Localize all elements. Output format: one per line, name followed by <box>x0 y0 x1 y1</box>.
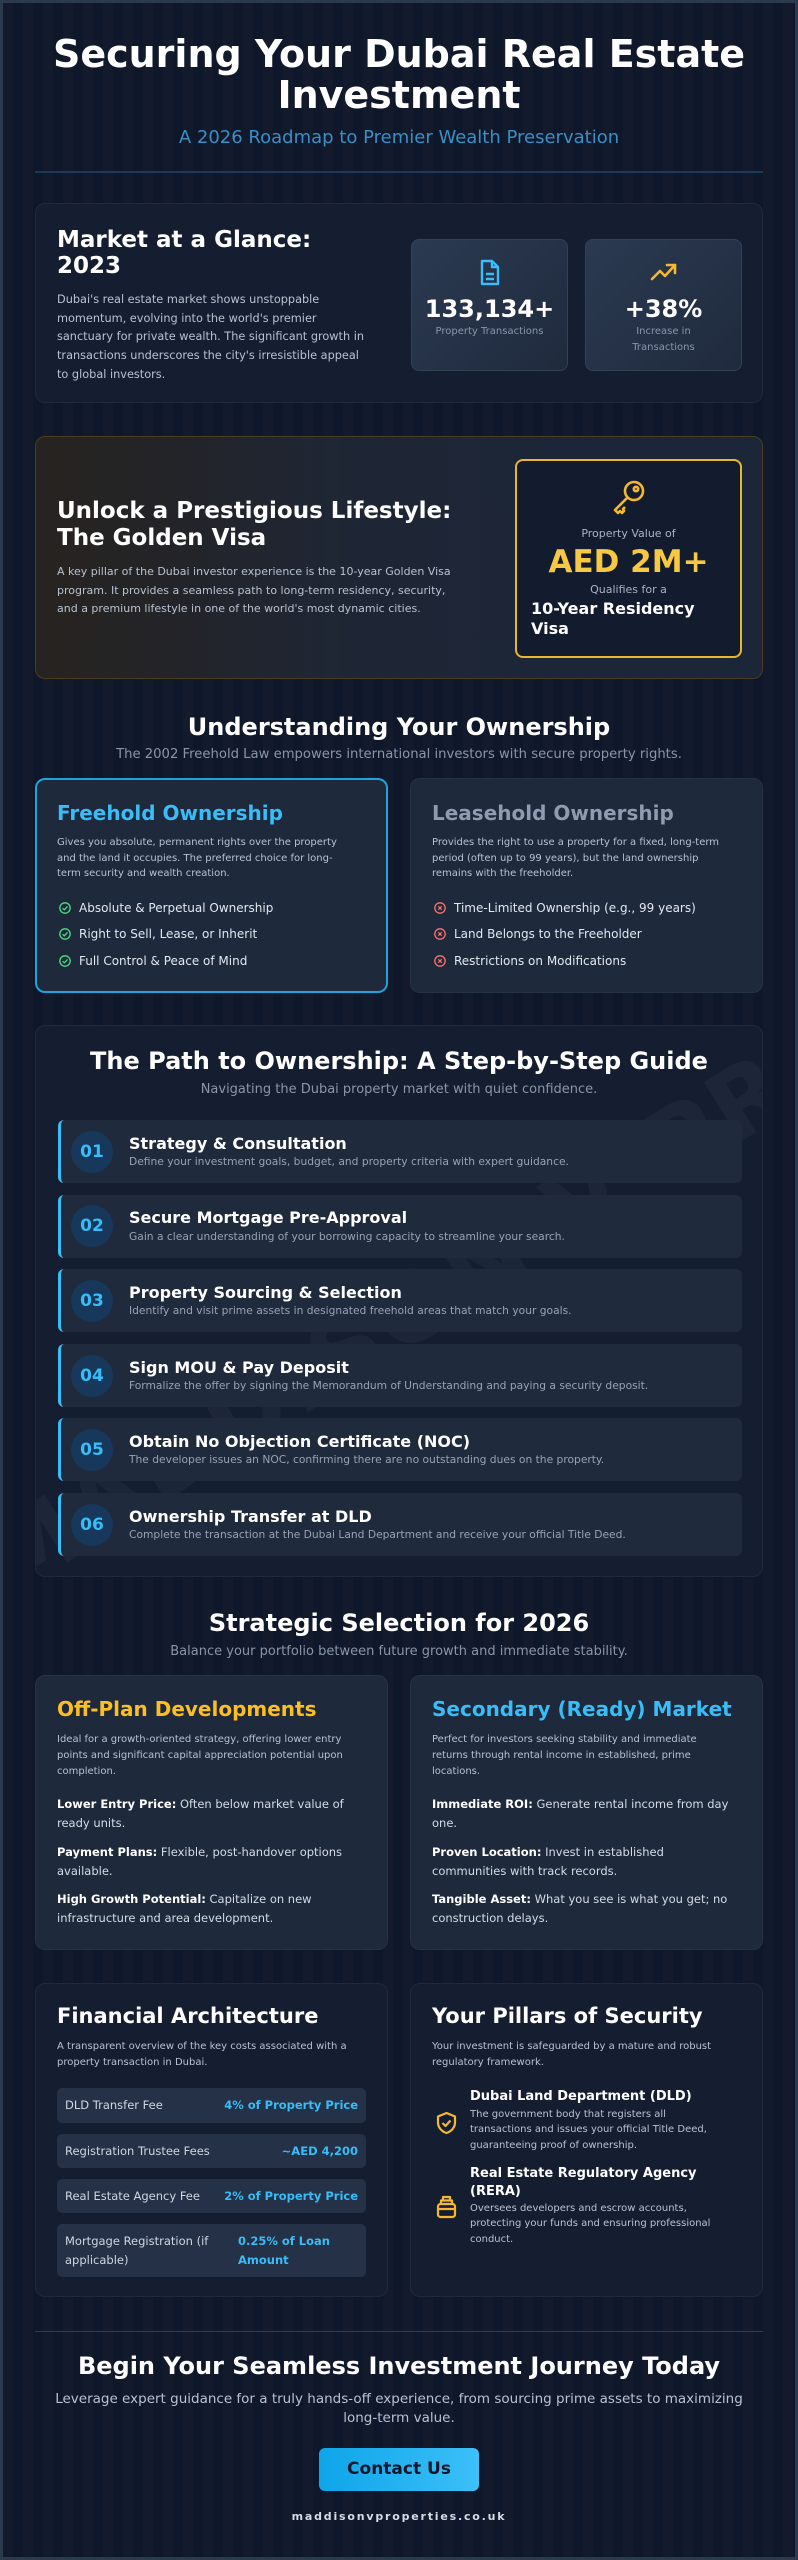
stat: increase <box>585 239 742 371</box>
button: contact us <box>319 2448 479 2491</box>
step 05: 05 <box>80 1440 104 1460</box>
panel: golden visa <box>35 436 763 679</box>
step 05 <box>58 1418 742 1481</box>
panel: secondary market: Tangible Asset: What you see is what you get; no construction delays. <box>432 1892 727 1925</box>
step 01: Define your investment goals, budget, and property criteria with expert guidance. <box>129 1155 569 1168</box>
step 04: Sign MOU & Pay Deposit <box>129 1358 349 1376</box>
step 03 <box>58 1269 742 1332</box>
CTA text: Leverage expert guidance for a truly hands-off experience, from sourcing prime assets to maximizing long-term value. <box>55 2391 743 2426</box>
panel: financial architecture: Financial Architecture <box>57 2004 318 2028</box>
fee row: trustee <box>57 2134 366 2168</box>
icon: key <box>614 480 644 514</box>
title <box>53 32 745 117</box>
panel: freehold: and the land it occupies. The preferred choice for long- <box>57 852 333 864</box>
step 03: 03 <box>80 1290 104 1310</box>
step 05: The developer issues an NOC, confirming there are no outstanding dues on the property. <box>129 1453 604 1466</box>
steps heading: The Path to Ownership: A Step-by-Step Guide <box>90 1047 708 1075</box>
list: leasehold limits <box>434 901 696 915</box>
golden visa text: A key pillar of the Dubai investor experience is the 10-year Golden Visa <box>57 565 451 578</box>
subheading: The 2002 Freehold Law empowers international investors with secure property rights. <box>116 747 682 762</box>
panel: off-plan: Off-Plan Developments <box>57 1697 317 1721</box>
fee row: DLD: DLD Transfer Fee <box>65 2098 163 2112</box>
pillar: DLD: The government body that registers all transactions and issues your official Title Deed, guaranteeing proof of ownership. <box>470 2108 707 2151</box>
step 02: 02 <box>80 1216 104 1236</box>
fee row: trustee: Registration Trustee Fees <box>65 2144 210 2158</box>
panel: freehold: Freehold Ownership <box>57 801 283 825</box>
panel: off-plan <box>35 1675 388 1950</box>
panel: leasehold: Time-Limited Ownership (e.g., 99 years) <box>454 901 696 915</box>
pillar: RERA: Real Estate Regulatory Agency (RERA) <box>470 2166 697 2198</box>
panel: pillars of security: Your Pillars of Security <box>432 2004 703 2028</box>
panel: secondary market <box>410 1675 763 1950</box>
panel: leasehold: period (often up to 99 years), but the land ownership <box>432 852 698 864</box>
pillar: DLD <box>470 2088 707 2151</box>
stat: increase: Increase in <box>636 326 691 337</box>
step 04: 04 <box>80 1366 104 1386</box>
step 03: Identify and visit prime assets in designated freehold areas that match your goals. <box>129 1304 572 1317</box>
panel: freehold: Right to Sell, Lease, or Inherit <box>79 927 257 941</box>
stat: transactions: Property Transactions <box>436 326 543 337</box>
panel: off-plan: High Growth Potential: Capitalize on new infrastructure and area development. <box>57 1892 312 1925</box>
panel: steps: Navigating the Dubai property market with quiet confidence. <box>201 1082 597 1097</box>
panel: freehold: Absolute & Perpetual Ownership <box>79 901 273 915</box>
title: Investment <box>277 73 521 117</box>
step 06 <box>58 1493 742 1556</box>
panel: freehold: Gives you absolute, permanent rights over the property <box>57 837 337 848</box>
golden visa text <box>57 565 451 615</box>
stat: transactions <box>411 239 568 371</box>
panel: financial architecture: A transparent overview of the key costs associated with a property transaction in Dubai. <box>57 2041 347 2068</box>
fee row: mortgage <box>57 2224 366 2277</box>
step 05: Obtain No Objection Certificate (NOC) <box>129 1432 470 1450</box>
panel: financial architecture <box>35 1983 388 2297</box>
pillar: DLD: Dubai Land Department (DLD) <box>470 2088 692 2104</box>
step 06: Complete the transaction at the Dubai Land Department and receive your official Title Deed. <box>129 1528 626 1541</box>
icon: trend arrow <box>650 264 676 280</box>
fee row: trustee: ~AED 4,200 <box>282 2144 358 2158</box>
panel: pillars of security: Your investment is safeguarded by a mature and robust regulatory framework. <box>432 2041 711 2068</box>
step 02: Secure Mortgage Pre-Approval <box>129 1208 407 1227</box>
panel: freehold <box>35 778 388 993</box>
step 02: Gain a clear understanding of your borrowing capacity to streamline your search. <box>129 1230 565 1242</box>
panel: secondary market: Immediate ROI: Generate rental income from day one. <box>432 1797 728 1830</box>
panel: off-plan: Ideal for a growth-oriented strategy, offering lower entry points and significant capital appreciation potential upon completion. <box>57 1734 343 1777</box>
market text <box>57 293 364 381</box>
callout: AED 2M+: 10-Year Residency Visa <box>531 599 695 638</box>
panel: pillars of security <box>410 1983 763 2297</box>
market text: to global investors. <box>57 368 165 381</box>
icon: vault <box>436 2196 456 2218</box>
pillar: RERA <box>470 2166 710 2245</box>
subtitle: A 2026 Roadmap to Premier Wealth Preservation <box>179 127 619 148</box>
callout: AED 2M+: Qualifies for a <box>590 583 667 596</box>
title: Securing Your Dubai Real Estate <box>53 32 745 76</box>
golden visa heading: The Golden Visa <box>57 525 266 551</box>
fee row: agency: 2% of Property Price <box>224 2189 358 2203</box>
panel: market at a glance <box>35 203 763 403</box>
list: freehold benefits <box>59 901 273 915</box>
step 06: 06 <box>80 1514 104 1534</box>
subheading: Balance your portfolio between future growth and immediate stability. <box>170 1644 628 1659</box>
panel: freehold: Full Control & Peace of Mind <box>79 954 247 968</box>
panel: secondary market: Proven Location: Invest in established communities with track records. <box>432 1845 664 1878</box>
step 01 <box>58 1120 742 1183</box>
button: contact us: Contact Us <box>347 2459 451 2479</box>
panel: off-plan: Lower Entry Price: Often below market value of ready units. <box>57 1797 344 1830</box>
fee row: DLD <box>57 2088 366 2123</box>
step 02 <box>58 1194 742 1258</box>
panel: secondary market: Secondary (Ready) Market <box>432 1697 732 1721</box>
fee row: mortgage: Mortgage Registration (if applicable) <box>65 2234 208 2266</box>
callout: AED 2M+: AED 2M+ <box>548 544 709 580</box>
panel: leasehold: Provides the right to use a property for a fixed, long-term <box>432 837 719 848</box>
callout: AED 2M+: Property Value of <box>581 527 676 540</box>
website: maddisonvproperties.co.uk <box>292 2510 506 2523</box>
step 04: Formalize the offer by signing the Memorandum of Understanding and paying a security deposit. <box>129 1379 648 1392</box>
golden visa heading: Unlock a Prestigious Lifestyle: <box>57 498 451 524</box>
market heading: 2023 <box>57 253 121 279</box>
market heading: Market at a Glance: <box>57 227 311 253</box>
fee row: DLD: 4% of Property Price <box>224 2098 358 2112</box>
stat: increase: +38% <box>625 295 702 323</box>
panel: secondary market: Perfect for investors seeking stability and immediate returns through rental income in established, prime locations. <box>432 1734 697 1777</box>
step 01: 01 <box>80 1142 104 1162</box>
icon: document <box>480 260 500 286</box>
panel: freehold: term security and wealth creation. <box>57 868 230 879</box>
panel: leasehold: remains with the freeholder. <box>432 868 573 879</box>
icon: shield <box>436 2112 456 2134</box>
pillar: RERA: Oversees developers and escrow accounts, protecting your funds and ensuring professional conduct. <box>470 2202 710 2245</box>
market text: transactions underscores the city's irresistible appeal <box>57 349 359 362</box>
golden visa text: program. It provides a seamless path to long-term residency, security, <box>57 584 445 596</box>
fee row: mortgage: 0.25% of Loan Amount <box>238 2234 330 2266</box>
market heading <box>57 227 311 279</box>
golden visa heading <box>57 498 451 551</box>
stat: increase: Transactions <box>632 342 695 353</box>
heading: understanding ownership: Understanding Your Ownership <box>188 713 610 741</box>
market text: Dubai's real estate market shows unstoppable <box>57 293 319 306</box>
step 04 <box>58 1344 742 1407</box>
golden visa text: and a premium lifestyle in one of the world's most dynamic cities. <box>57 602 421 615</box>
panel: leasehold: Leasehold Ownership <box>432 801 674 825</box>
market text: sanctuary for private wealth. The significant growth in <box>57 330 364 343</box>
callout: AED 2M+ <box>515 459 742 658</box>
stat: transactions: 133,134+ <box>425 295 554 323</box>
heading: strategic selection: Strategic Selection for 2026 <box>209 1609 589 1637</box>
market text: momentum, evolving into the world's premier <box>57 312 317 325</box>
panel: leasehold <box>410 778 763 993</box>
CTA heading: Begin Your Seamless Investment Journey Today <box>78 2352 720 2380</box>
panel: leasehold: Land Belongs to the Freeholder <box>454 927 642 941</box>
panel: off-plan: Payment Plans: Flexible, post-handover options available. <box>57 1845 342 1878</box>
fee row: agency: Real Estate Agency Fee <box>65 2189 200 2203</box>
step 06: Ownership Transfer at DLD <box>129 1506 372 1526</box>
panel: leasehold: Restrictions on Modifications <box>454 954 626 968</box>
step 03: Property Sourcing & Selection <box>129 1282 402 1302</box>
step 01: Strategy & Consultation <box>129 1134 347 1152</box>
fee row: agency <box>57 2179 366 2213</box>
